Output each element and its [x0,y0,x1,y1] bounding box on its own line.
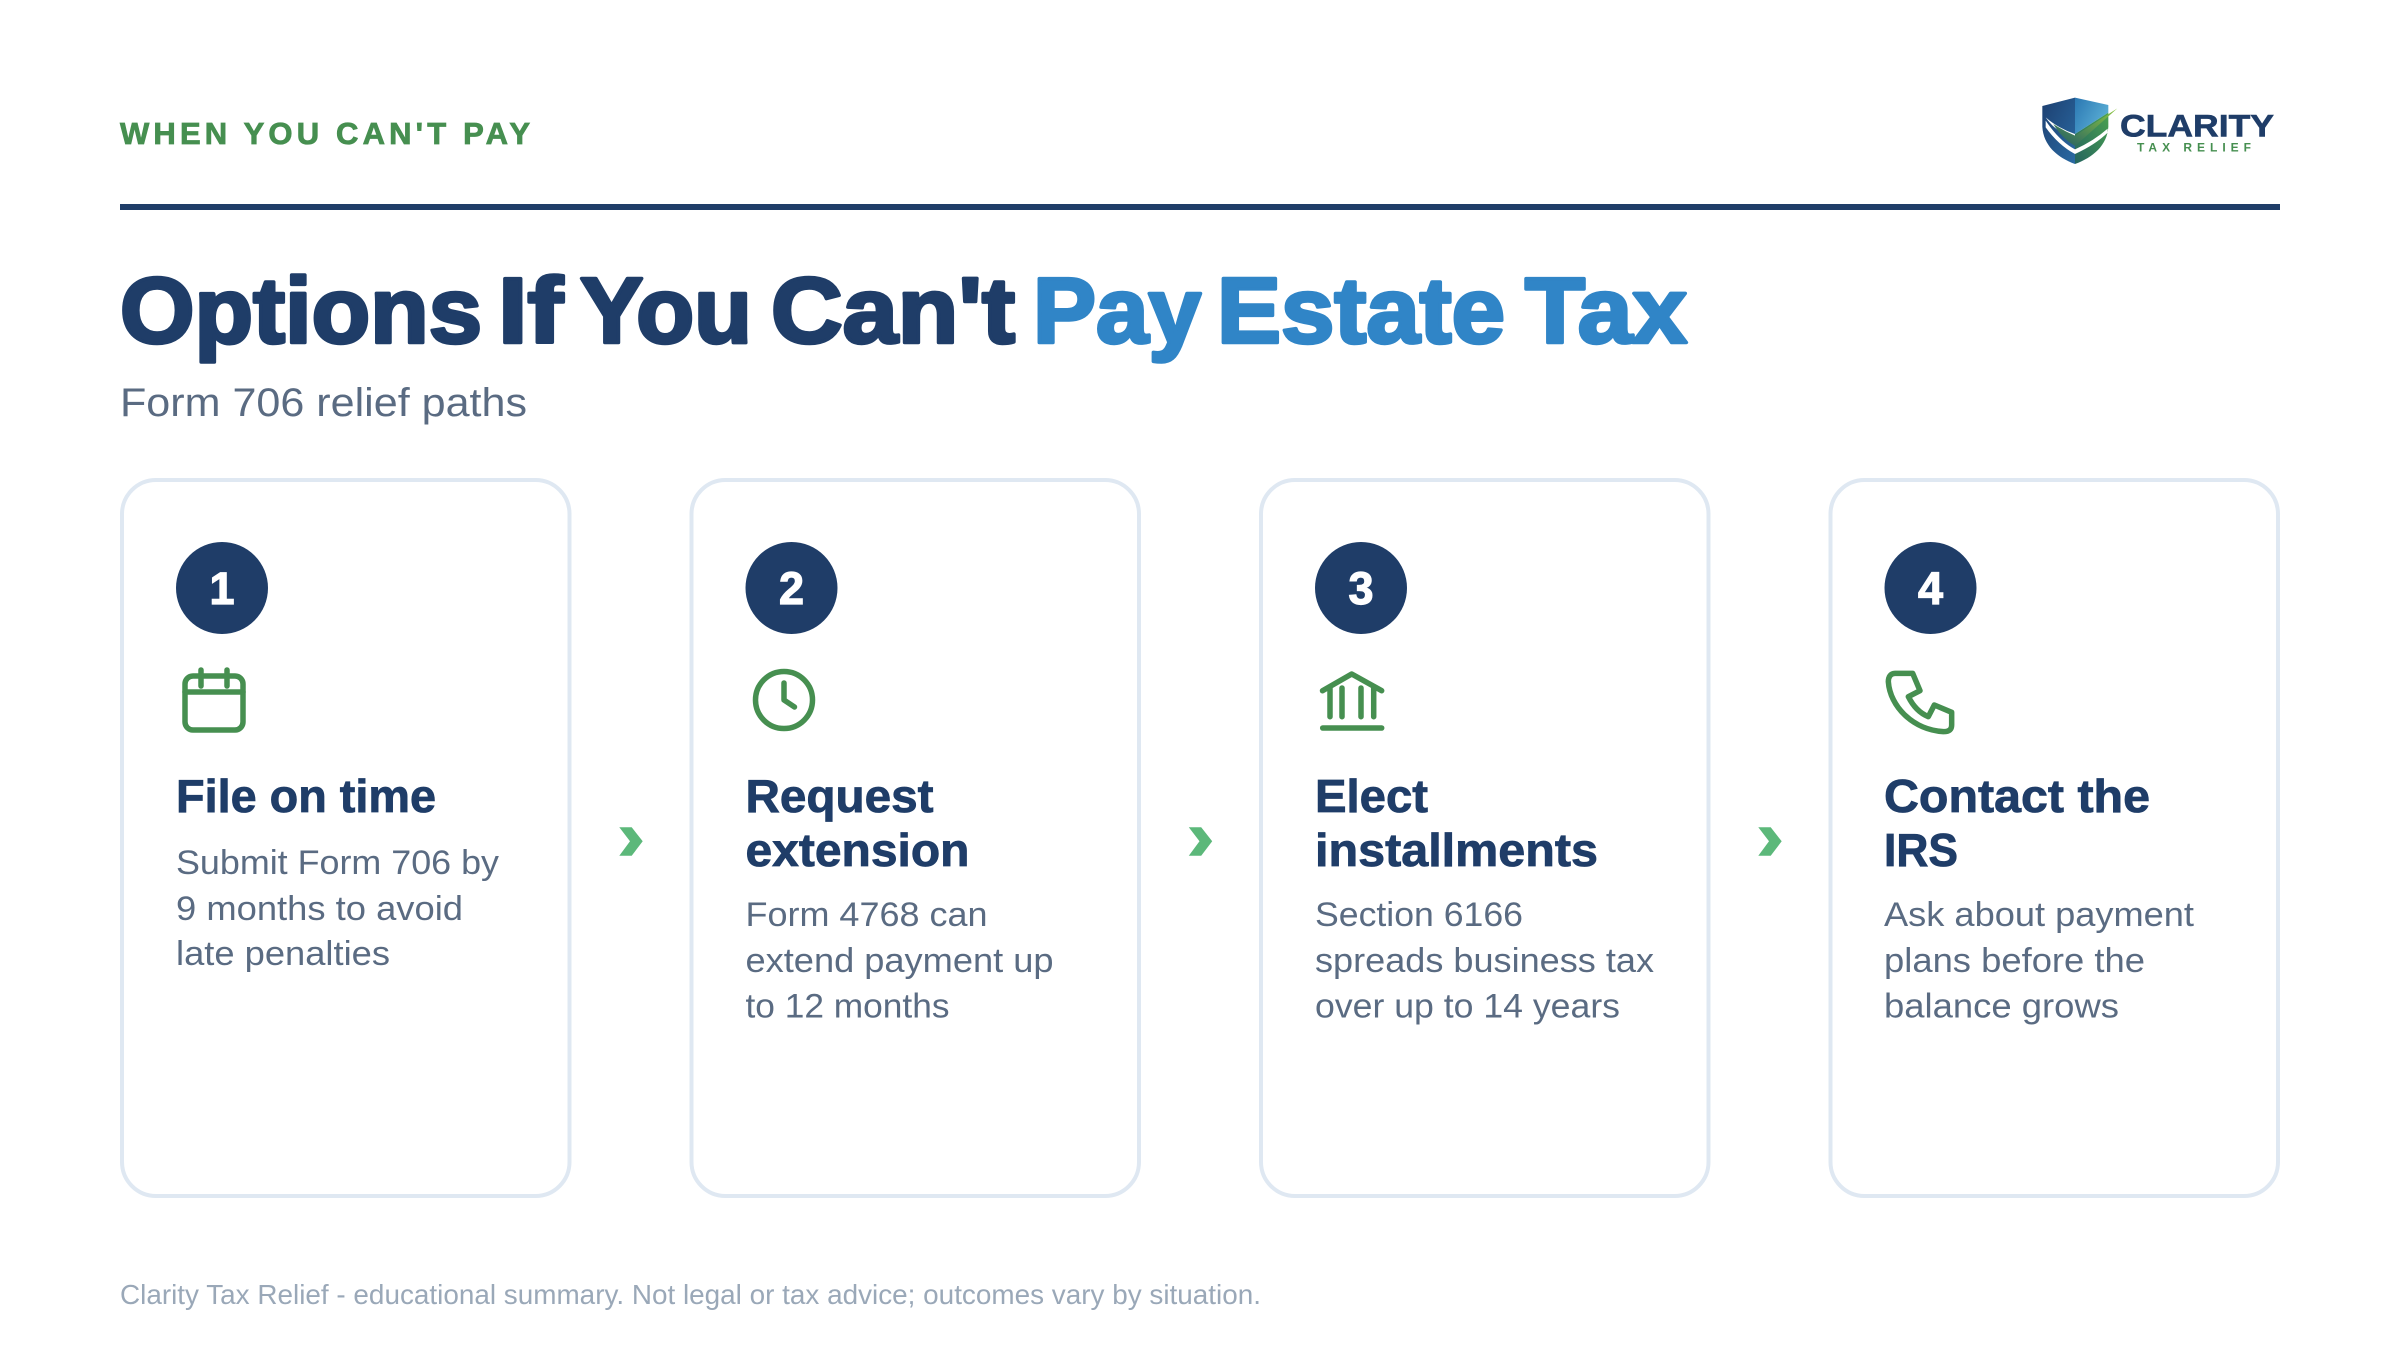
icon: clock [756,672,812,728]
logo tagline: TAX RELIEF [2137,141,2251,155]
step number 1 [176,542,268,634]
panel: step 3 elect installments [1261,480,1708,1196]
step 2 description: Form 4768 can [746,896,988,934]
step 4 heading [1884,770,2150,876]
step 1 description [176,844,500,973]
title: Can't [771,258,1015,362]
step number 4: 4 [1918,563,1943,614]
step 3 description: spreads business tax [1315,942,1654,980]
step 1 description: 9 months to avoid [176,890,463,928]
step 1 description: late penalties [176,935,390,973]
step 3 description [1315,896,1654,1026]
arrow 1 [619,827,643,856]
title: Pay [1033,258,1201,362]
title: Tax [1525,258,1687,362]
step number 3 [1315,542,1407,634]
step 2 heading: Request [746,770,934,822]
footer disclaimer: Clarity Tax Relief - educational summary. Not legal or tax advice; outcomes vary by situation. [120,1279,1261,1310]
step number 3: 3 [1348,563,1374,614]
panel: step 1 file on time [122,480,570,1196]
step number 1: 1 [209,563,235,614]
step 3 heading [1315,770,1598,876]
logo: Clarity Tax Relief [2042,98,2274,164]
icon: shield with check [2042,98,2117,164]
logo wordmark: CLARITY [2120,108,2274,144]
subtitle: Form 706 relief paths [120,381,527,425]
step number 4 [1884,542,1976,634]
eyebrow heading: WHEN YOU CAN'T PAY [120,116,530,151]
step 2 description: extend payment up [746,942,1054,980]
step 1 description: Submit Form 706 by [176,844,500,882]
step 4 heading: IRS [1884,824,1958,876]
step 3 description: Section 6166 [1315,896,1523,934]
icon: calendar [185,670,243,730]
step 4 heading: Contact the [1884,770,2150,822]
step 4 description: Ask about payment [1884,896,2194,934]
arrow 3 [1758,827,1782,856]
step 4 description: plans before the [1884,942,2145,980]
title: You [580,258,752,362]
title: Options [120,258,482,362]
step 3 heading: Elect [1315,770,1428,822]
step 2 heading: extension [746,824,970,876]
step number 2 [746,542,838,634]
panel: step 2 request extension [692,480,1139,1196]
step 1 heading: File on time [176,770,436,822]
arrow 2 [1189,827,1212,856]
step 2 heading [746,770,970,876]
step 4 description: balance grows [1884,988,2119,1026]
icon: bank [1322,674,1382,728]
panel: step 4 contact the IRS [1830,480,2278,1196]
step 4 description [1884,896,2194,1026]
icon: phone [1888,673,1952,732]
title: Estate [1217,258,1505,362]
step 2 description [746,896,1054,1026]
step 2 description: to 12 months [746,988,950,1026]
title: If [498,258,564,362]
step 3 heading: installments [1315,824,1598,876]
title [120,258,1687,362]
step number 2: 2 [779,563,804,614]
step 3 description: over up to 14 years [1315,988,1620,1026]
